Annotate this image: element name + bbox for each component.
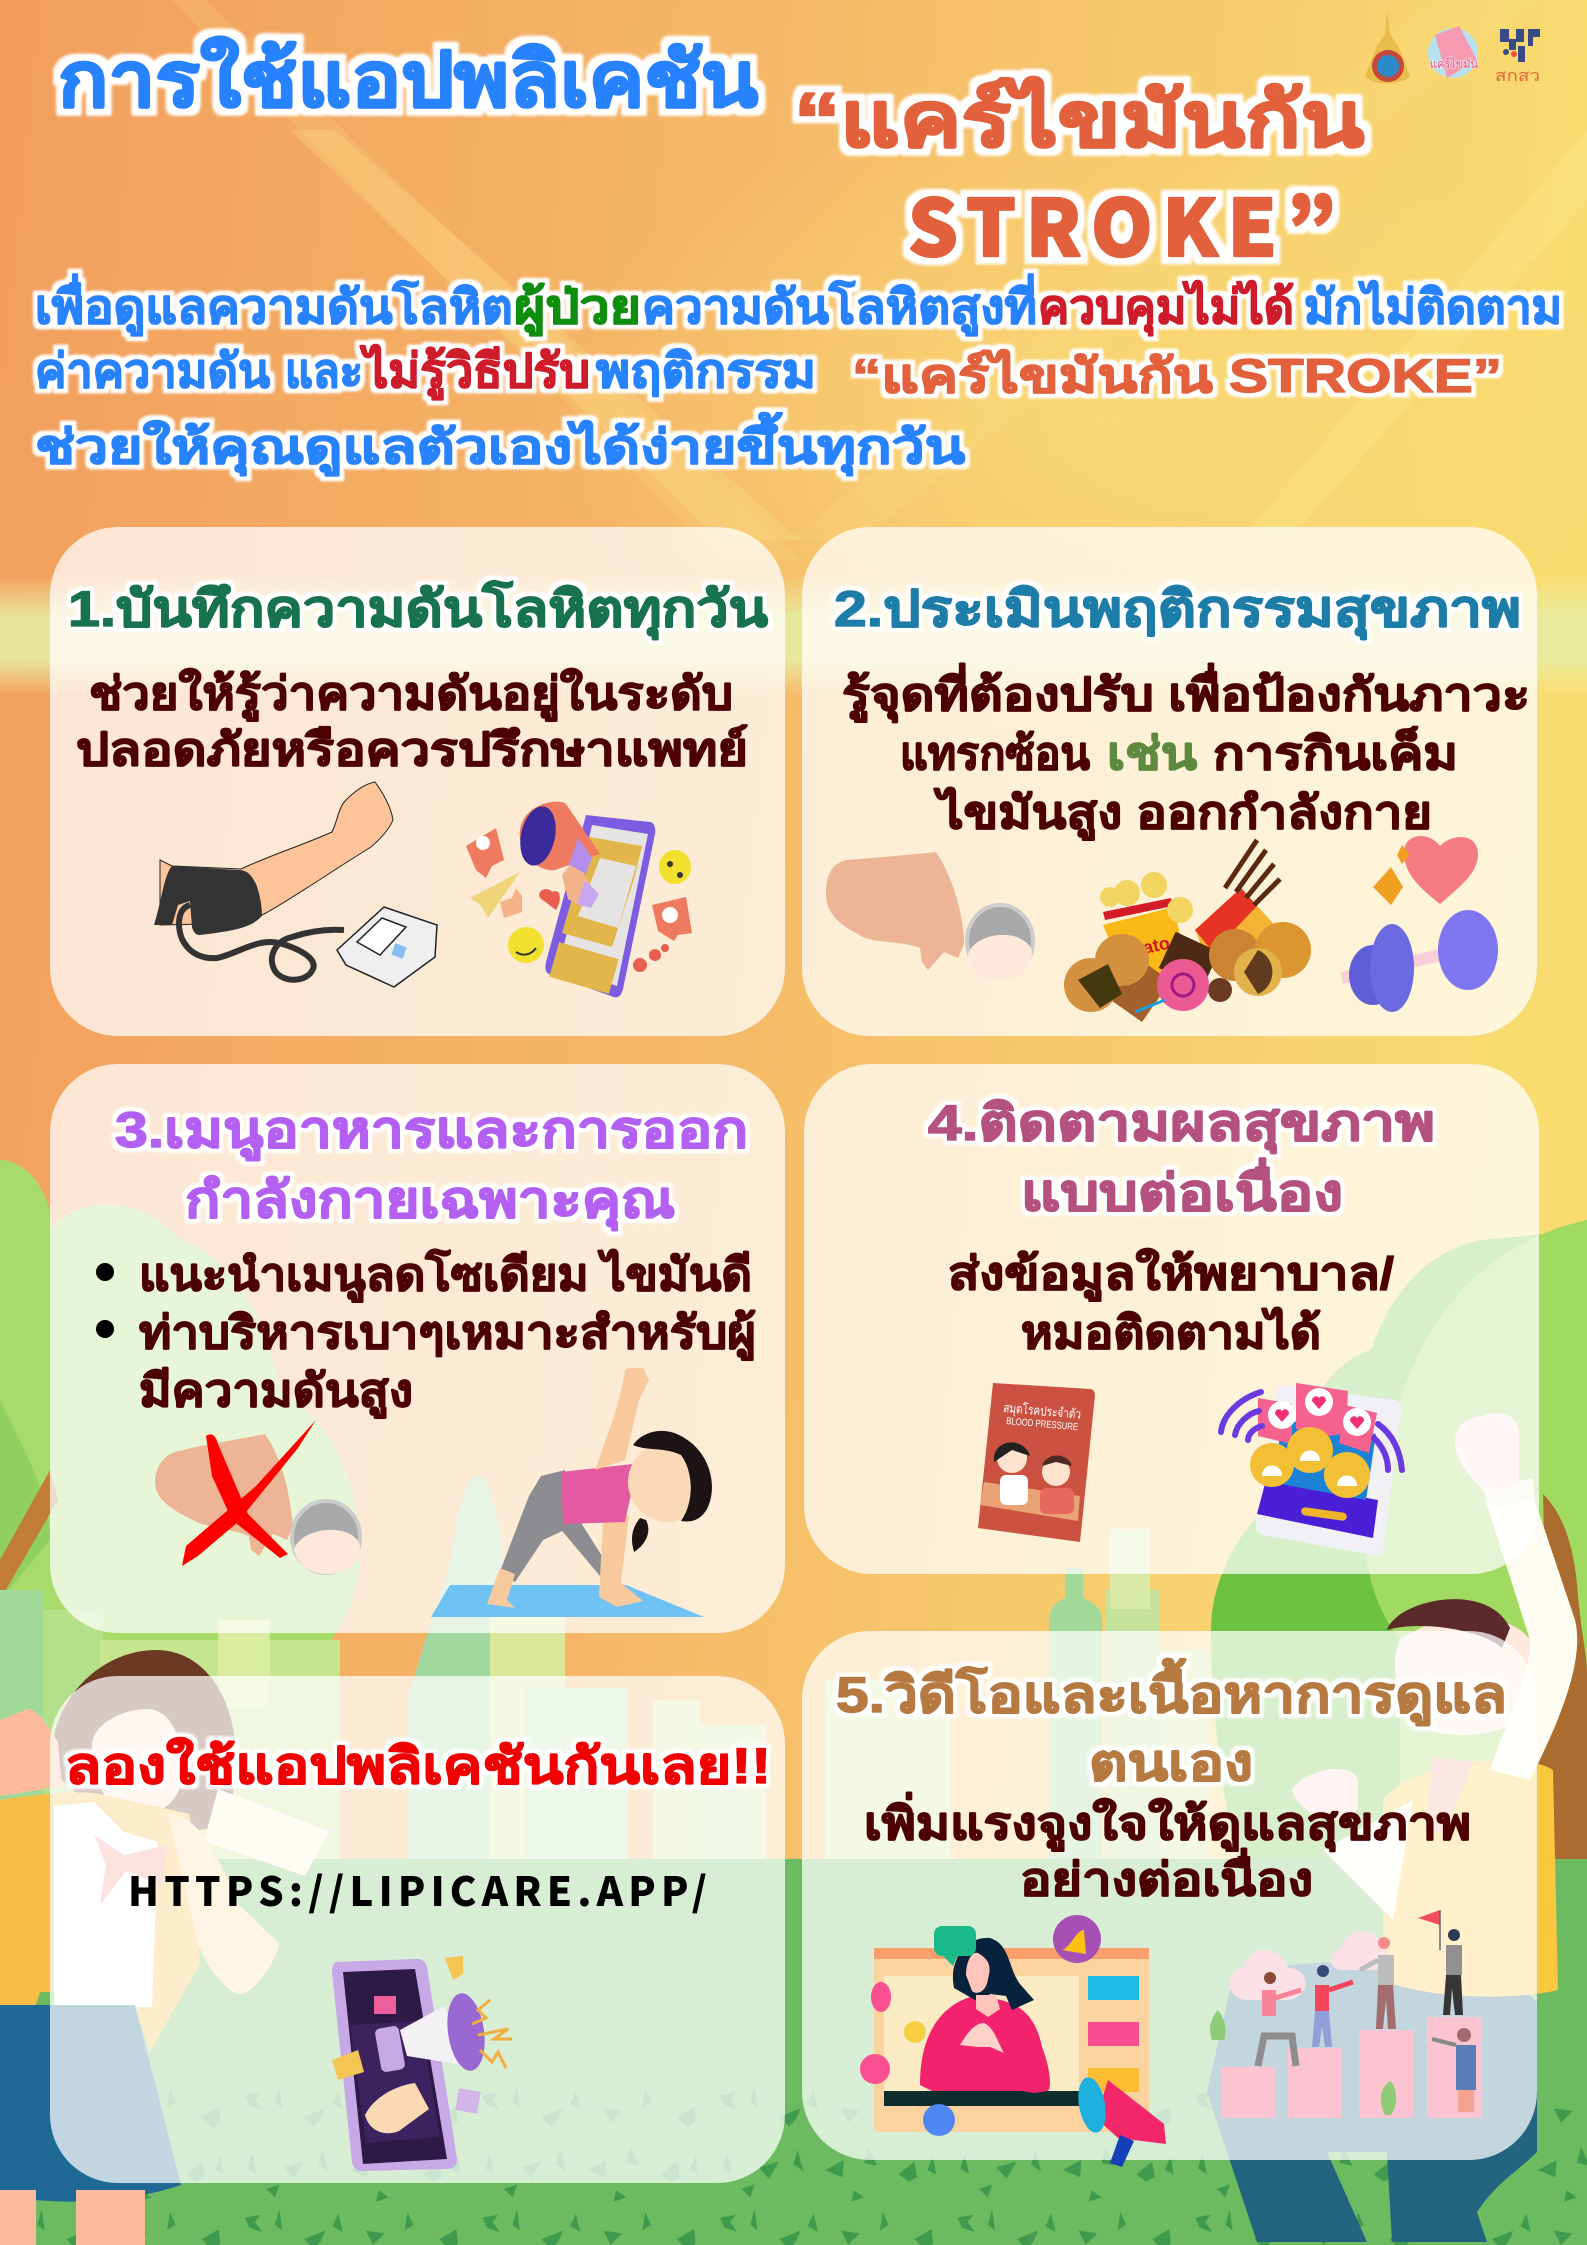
icon: hand pouring salt spoon bbox=[826, 852, 1033, 981]
icon: phone with megaphone bbox=[332, 1956, 512, 2171]
character: girl holding card bbox=[0, 1650, 329, 2245]
panel 1 heading: 1.บันทึกความดันโลหิตทุกวัน bbox=[68, 579, 768, 640]
icon: phone with hearts and followers bbox=[1221, 1383, 1402, 1555]
panel 3 bullets: ท่าบริหารเบาๆเหมาะสำหรับผู้ bbox=[139, 1307, 756, 1361]
icon: blood pressure notebook: สมุดโรคประจำตัว bbox=[1003, 1400, 1082, 1423]
panel 2 body bbox=[842, 663, 1530, 841]
icon: salty and sweet snacks bbox=[1064, 840, 1311, 1022]
panel 3 heading: 3.เมนูอาหารและการออก bbox=[115, 1102, 748, 1161]
intro text line 2: ค่าความดัน bbox=[35, 344, 270, 397]
icon: megaphone bbox=[1074, 2075, 1166, 2167]
panel 2 body: แทรกซ้อน bbox=[900, 728, 1090, 779]
panel 2 body: รู้จุดที่ต้องปรับ เพื่อป้องกันภาวะ bbox=[842, 663, 1530, 723]
right tree bbox=[1211, 1230, 1587, 1990]
icon: video creator window bbox=[860, 1915, 1149, 2136]
icon: blood pressure notebook bbox=[978, 1383, 1095, 1542]
intro text line 1: เพื่อดูแลความดันโลหิต bbox=[35, 273, 513, 337]
title: STROKE: STROKE” bbox=[908, 167, 1336, 279]
intro text line 1: มักไม่ติดตาม bbox=[1304, 279, 1562, 333]
panel 3 heading bbox=[115, 1102, 748, 1231]
icon: people climbing steps bbox=[1210, 1910, 1482, 2118]
panel 4 body: หมอติดตามได้ bbox=[1021, 1306, 1321, 1358]
panel 5 body bbox=[864, 1792, 1471, 1905]
intro text line 1 bbox=[35, 273, 1562, 337]
panel 4 body: ส่งข้อมูลให้พยาบาล/ bbox=[948, 1247, 1395, 1302]
panel: try the app bbox=[50, 1676, 785, 2183]
logos: แคร์ไขมัน bbox=[1430, 56, 1479, 71]
panel 2 body: การกินเค็ม bbox=[1213, 726, 1458, 779]
intro text line 2 bbox=[35, 343, 1502, 402]
icon: arm with blood pressure monitor bbox=[154, 782, 437, 987]
panel 5 body: เพิ่มแรงจูงใจให้ดูแลสุขภาพ bbox=[864, 1792, 1471, 1852]
panel: 1 record blood pressure bbox=[50, 527, 785, 1036]
icon: crossed-out salt spoon bbox=[155, 1420, 360, 1574]
intro text line 1: ควบคุมไม่ได้ bbox=[1038, 279, 1294, 336]
panel: 4 health monitoring bbox=[804, 1064, 1539, 1574]
icon: heart and dumbbell bbox=[1341, 836, 1498, 1012]
logos: สกสว bbox=[1495, 68, 1540, 85]
title: แคร์ไขมันกัน: “แคร์ไขมันกัน bbox=[794, 76, 1364, 163]
intro text line 1: ความดันโลหิตสูงที่ bbox=[642, 273, 1037, 337]
intro text line 2: พฤติกรรม bbox=[596, 344, 816, 397]
panel 2 body: เช่น bbox=[1107, 728, 1197, 779]
panel 5 body: อย่างต่อเนื่อง bbox=[1020, 1848, 1313, 1905]
city bbox=[0, 1475, 1210, 1860]
panel 1 body: ช่วยให้รู้ว่าความดันอยู่ในระดับ bbox=[89, 667, 733, 722]
panel 2 body: ไขมันสูง ออกกำลังกาย bbox=[933, 786, 1432, 841]
left tree and trunk bbox=[0, 1160, 360, 1680]
icon: girl doing yoga bbox=[431, 1368, 712, 1617]
panel 4 heading: 4.ติดตามผลสุขภาพ bbox=[928, 1095, 1435, 1154]
character: boy raising fist bbox=[1207, 1413, 1577, 2242]
app url: HTTPS://LIPICARE.APP/ bbox=[128, 1860, 707, 1918]
panel 3 heading: กำลังกายเฉพาะคุณ bbox=[185, 1172, 675, 1231]
panel 2 heading: 2.ประเมินพฤติกรรมสุขภาพ bbox=[834, 581, 1521, 640]
icon: salty and sweet snacks: Potato bbox=[1113, 933, 1172, 964]
panel: 2 behaviour assessment bbox=[802, 527, 1537, 1036]
panel 3 bullets: มีความดันสูง bbox=[139, 1365, 413, 1419]
panel 4 heading bbox=[928, 1095, 1435, 1221]
panel 1 body bbox=[76, 667, 748, 775]
intro text line 1: ผู้ป่วย bbox=[514, 280, 641, 337]
intro text line 2: “แคร์ไขมันกัน STROKE” bbox=[852, 348, 1502, 402]
icon: blood pressure notebook: BLOOD PRESSURE bbox=[1006, 1416, 1079, 1433]
panel 1 body: ปลอดภัยหรือควรปรึกษาแพทย์ bbox=[76, 724, 748, 775]
cta heading: ลองใช้แอปพลิเคชันกันเลย!! bbox=[65, 1737, 771, 1794]
panel 4 body bbox=[948, 1247, 1395, 1358]
panel 4 heading: แบบต่อเนื่อง bbox=[1021, 1158, 1343, 1221]
intro text line 2: ไม่รู้วิธีปรับ bbox=[359, 343, 590, 401]
panel: 3 menu and exercise bbox=[50, 1064, 785, 1633]
panel 3 bullets: แนะนำเมนูลดโซเดียม ไขมันดี bbox=[139, 1248, 752, 1303]
panel 5 heading: 5.วิดีโอและเนื้อหาการดูแล bbox=[836, 1658, 1507, 1726]
panel 5 heading: ตนเอง bbox=[1089, 1735, 1253, 1791]
intro text line 2: และ bbox=[285, 344, 363, 397]
panel: 5 video and self-care content bbox=[802, 1631, 1537, 2160]
logos bbox=[1365, 10, 1540, 85]
icon: phone with megaphone and emoji bbox=[466, 802, 692, 997]
panel 3 bullets bbox=[96, 1248, 756, 1419]
intro text line 3: ช่วยให้คุณดูแลตัวเองได้ง่ายขึ้นทุกวัน bbox=[35, 412, 965, 477]
panel 5 heading bbox=[836, 1658, 1507, 1791]
title: การใช้แอปพลิเคชัน: การใช้แอปพลิเคชัน bbox=[58, 36, 758, 123]
